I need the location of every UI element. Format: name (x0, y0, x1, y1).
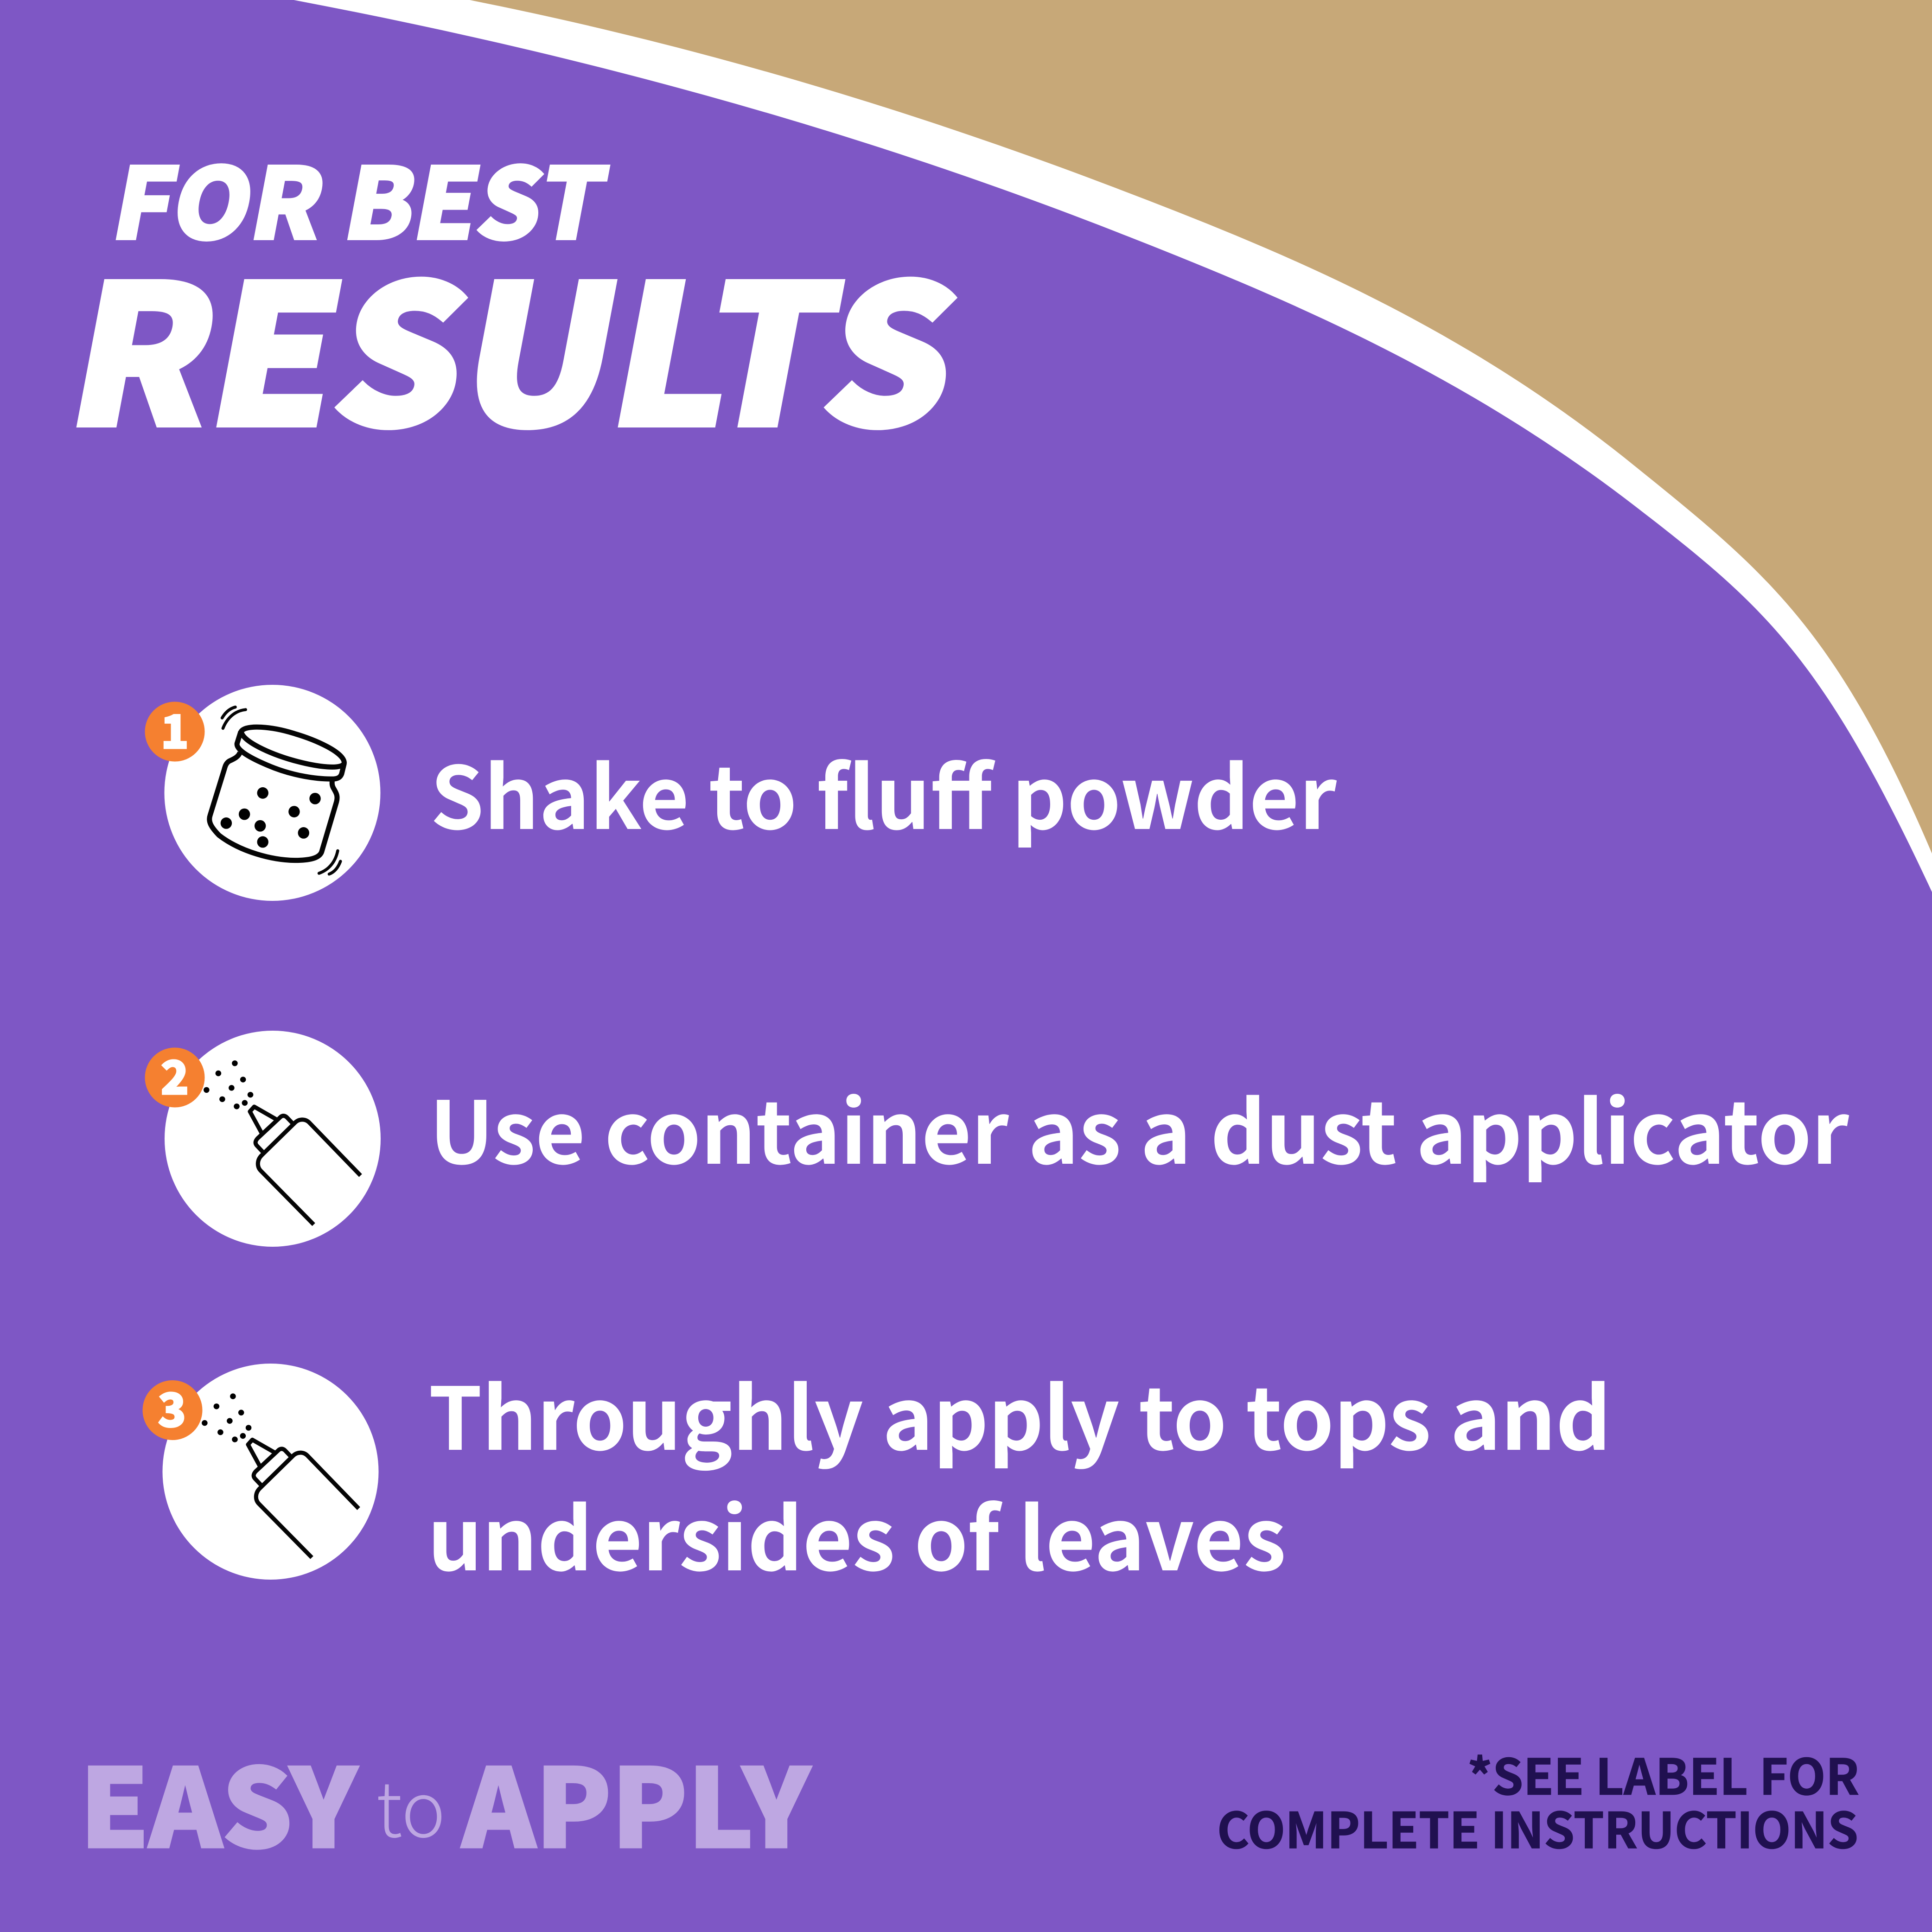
to word: to (376, 1748, 446, 1859)
footnote line 1: *SEE LABEL FOR (1467, 1738, 1859, 1809)
bottle drawing (204, 1060, 361, 1224)
bottle drawing (202, 1393, 359, 1557)
white circle (164, 685, 380, 901)
title line: for best: FOR BEST (103, 125, 619, 268)
jar drawing (210, 707, 344, 874)
step 1 icon: shaking jar (145, 685, 380, 901)
apply word: APPLY (461, 1722, 811, 1879)
step 1 text: Shake to fluff powder (430, 729, 1337, 854)
step 3 text (427, 1350, 1611, 1595)
number badge 3: 3 (158, 1373, 186, 1440)
white circle (162, 1364, 378, 1580)
easy word: EASY (80, 1722, 358, 1879)
footnote (1217, 1738, 1859, 1862)
step 3 text line 2: undersides of leaves (427, 1470, 1286, 1595)
number badge 3 (143, 1373, 202, 1440)
tan corner shape (470, 0, 1932, 854)
step 3 icon: dust applicator bottle (143, 1364, 378, 1580)
white circle (165, 1031, 381, 1247)
footnote line 2: COMPLETE INSTRUCTIONS (1217, 1791, 1858, 1862)
number badge 2 (145, 1040, 205, 1108)
white curved band (294, 0, 1932, 892)
number badge 2: 2 (161, 1040, 189, 1108)
step 2 text: Use container as a dust applicator (429, 1064, 1849, 1189)
easy to apply tagline (80, 1722, 811, 1879)
step 2 icon: dust applicator bottle (145, 1031, 381, 1247)
step 3 text line 1: Throughly apply to tops and (428, 1350, 1611, 1475)
number badge 1: 1 (161, 695, 189, 762)
title (51, 125, 984, 481)
title line: results: RESULTS (51, 201, 984, 481)
number badge 1 (145, 695, 205, 762)
